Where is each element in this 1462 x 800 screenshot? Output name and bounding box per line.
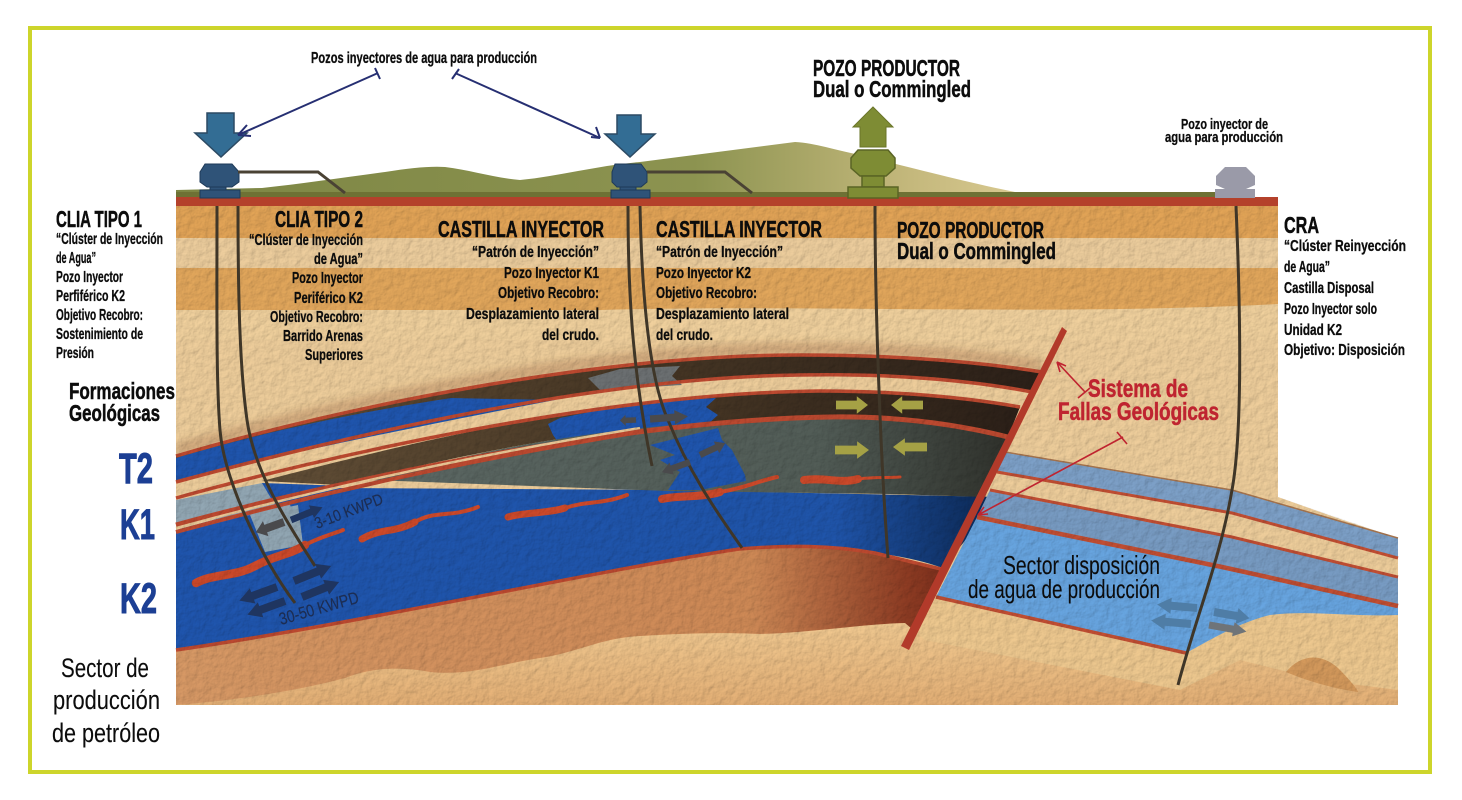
label: disposal sector bbox=[968, 550, 1160, 604]
basement rock bbox=[176, 546, 945, 705]
label: 3-10 KWPD: 3-10 KWPD bbox=[312, 491, 386, 533]
text block: CRA: Objetivo: Disposición bbox=[1284, 342, 1405, 359]
label: fault system: Sistema de bbox=[1088, 375, 1188, 403]
text block: CLIA TIPO 2: CLIA TIPO 2 bbox=[275, 206, 363, 232]
label: geological formations: Geológicas bbox=[69, 400, 160, 426]
arrow: production up bbox=[853, 107, 893, 147]
blue front in middle layer bbox=[548, 398, 718, 445]
label: 30-50 KWPD: 30-50 KWPD bbox=[277, 588, 361, 629]
heading: producer well bbox=[813, 55, 971, 102]
flow arrows bbox=[237, 396, 1251, 639]
gray patch between wells bbox=[250, 505, 303, 552]
text block: Castilla injector K2: “Patrón de Inyección” bbox=[656, 244, 783, 261]
gray swept patch in top layer bbox=[588, 366, 682, 390]
text block: CLIA TIPO 1: Objetivo Recobro: bbox=[56, 307, 143, 324]
text block: CRA: “Clúster Reinyección bbox=[1284, 238, 1406, 255]
text block: CRA: Pozo Inyector solo bbox=[1284, 301, 1377, 318]
text block: CLIA TIPO 1: CLIA TIPO 1 bbox=[56, 206, 142, 232]
text block: Castilla injector K2: Desplazamiento lateral bbox=[656, 306, 789, 323]
hills and grass bbox=[176, 142, 1216, 197]
text block: Castilla injector K1: Objetivo Recobro: bbox=[498, 285, 599, 302]
heading: CRA injector bbox=[1165, 116, 1283, 146]
bottom dunes bbox=[176, 623, 1398, 705]
text block: Castilla injector K2: Objetivo Recobro: bbox=[656, 285, 757, 302]
text block: CRA bbox=[1284, 212, 1406, 359]
texture overlay bbox=[176, 206, 1398, 706]
label: T2: T2 bbox=[119, 445, 153, 493]
text block: CLIA TIPO 1: Perfiférico K2 bbox=[56, 288, 125, 305]
heading: producer well: POZO PRODUCTOR bbox=[813, 55, 960, 81]
arrow: injection 1 bbox=[195, 113, 247, 157]
text block: Castilla injector K2: del crudo. bbox=[656, 327, 713, 344]
text block: producer in section bbox=[897, 217, 1056, 264]
wellhead: CRA bbox=[1215, 167, 1255, 198]
lower light-blue band bbox=[977, 490, 1398, 604]
blue wedge bbox=[262, 483, 345, 505]
text block: producer in section: Dual o Commingled bbox=[897, 238, 1056, 264]
panel: oil production sector strata bbox=[176, 355, 1042, 705]
heading: CRA injector: agua para producción bbox=[1165, 129, 1283, 146]
panel: disposal sector strata bbox=[905, 452, 1398, 705]
geological fault bbox=[901, 327, 1067, 650]
text block: Castilla injector K2: Pozo Inyector K2 bbox=[656, 265, 751, 282]
text block: CLIA TIPO 2: Periférico K2 bbox=[294, 290, 363, 307]
wellhead: producer bbox=[848, 150, 898, 198]
label: disposal sector: Sector disposición bbox=[1003, 550, 1160, 580]
text block: Castilla injector K1 bbox=[438, 216, 604, 344]
cross-section base: sand strata bbox=[176, 197, 1398, 705]
text block: CLIA TIPO 2: “Clúster de Inyección bbox=[249, 232, 363, 249]
text block: Castilla injector K1: Pozo Inyector K1 bbox=[504, 265, 599, 282]
text block: CRA: de Agua” bbox=[1284, 259, 1330, 276]
text block: CRA: Castilla Disposal bbox=[1284, 280, 1374, 297]
text block: Castilla injector K1: CASTILLA INYECTOR bbox=[438, 216, 604, 242]
wellhead: injector CLIA bbox=[200, 164, 345, 198]
text block: CLIA TIPO 2: de Agua” bbox=[314, 251, 363, 268]
disposal water layer bbox=[936, 517, 1398, 653]
oil streaks bbox=[196, 477, 900, 583]
T2 blue band bbox=[176, 398, 555, 480]
heading: CRA injector: Pozo inyector de bbox=[1181, 116, 1268, 133]
callout lines: fault system bbox=[978, 362, 1127, 515]
text block: CLIA TIPO 2: Pozo Inyector bbox=[292, 270, 363, 287]
text block: Castilla injector K1: “Patrón de Inyección” bbox=[472, 244, 599, 261]
label: oil production sector: de petróleo bbox=[52, 718, 160, 748]
shadow above strata bbox=[176, 349, 1042, 450]
text block: CLIA TIPO 2: Objetivo Recobro: bbox=[270, 309, 363, 326]
text block: CLIA TIPO 1: de Agua” bbox=[56, 250, 96, 267]
label: fault system bbox=[1058, 375, 1219, 426]
label: oil production sector bbox=[52, 653, 160, 748]
text block: CRA: CRA bbox=[1284, 212, 1319, 238]
upper layer brown bbox=[176, 355, 1042, 482]
text block: CLIA TIPO 1: “Clúster de Inyección bbox=[56, 231, 163, 248]
heading: producer well: Dual o Commingled bbox=[813, 76, 971, 102]
strata red lines bbox=[176, 355, 1042, 650]
arrow: injection 2 bbox=[605, 115, 655, 157]
label: geological formations: Formaciones bbox=[69, 378, 175, 404]
text block: CLIA TIPO 2: Barrido Arenas bbox=[283, 328, 363, 345]
text block: Castilla injector K1: del crudo. bbox=[542, 327, 599, 344]
text block: CLIA TIPO 1: Pozo Inyector bbox=[56, 269, 123, 286]
text block: CLIA TIPO 1: Sostenimiento de bbox=[56, 326, 143, 343]
text block: Castilla injector K2: CASTILLA INYECTOR bbox=[656, 216, 822, 242]
label: oil production sector: Sector de bbox=[61, 653, 149, 683]
text block: CLIA TIPO 1 bbox=[56, 206, 163, 362]
text block: CLIA TIPO 2 bbox=[249, 206, 363, 364]
K1 gray layer bbox=[370, 417, 1008, 497]
wellhead: injector Castilla bbox=[611, 164, 752, 198]
text block: producer in section: POZO PRODUCTOR bbox=[897, 217, 1044, 243]
middle layer brown bbox=[262, 391, 1020, 485]
callout lines: injectors bbox=[238, 68, 600, 138]
text block: CLIA TIPO 2: Superiores bbox=[305, 347, 363, 364]
wells bbox=[217, 206, 1240, 685]
text block: Castilla injector K1: Desplazamiento lateral bbox=[466, 306, 599, 323]
blue front in K1 layer bbox=[650, 428, 746, 490]
upper light-blue band bbox=[997, 452, 1398, 558]
text block: CLIA TIPO 1: Presión bbox=[56, 345, 94, 362]
K2 blue water layer bbox=[176, 488, 1000, 650]
text block: Castilla injector K2 bbox=[656, 216, 822, 344]
label: fault system: Fallas Geológicas bbox=[1058, 398, 1219, 426]
label: oil production sector: producción bbox=[53, 685, 160, 715]
label: disposal sector: de agua de producción bbox=[968, 574, 1160, 604]
T2 lower gray patch bbox=[176, 483, 292, 524]
heading: injector wells: Pozos inyectores de agua para producción bbox=[311, 50, 537, 67]
text block: CRA: Unidad K2 bbox=[1284, 322, 1342, 339]
label: K1: K1 bbox=[120, 501, 155, 549]
label: geological formations bbox=[69, 378, 175, 426]
label: K2: K2 bbox=[120, 575, 157, 623]
